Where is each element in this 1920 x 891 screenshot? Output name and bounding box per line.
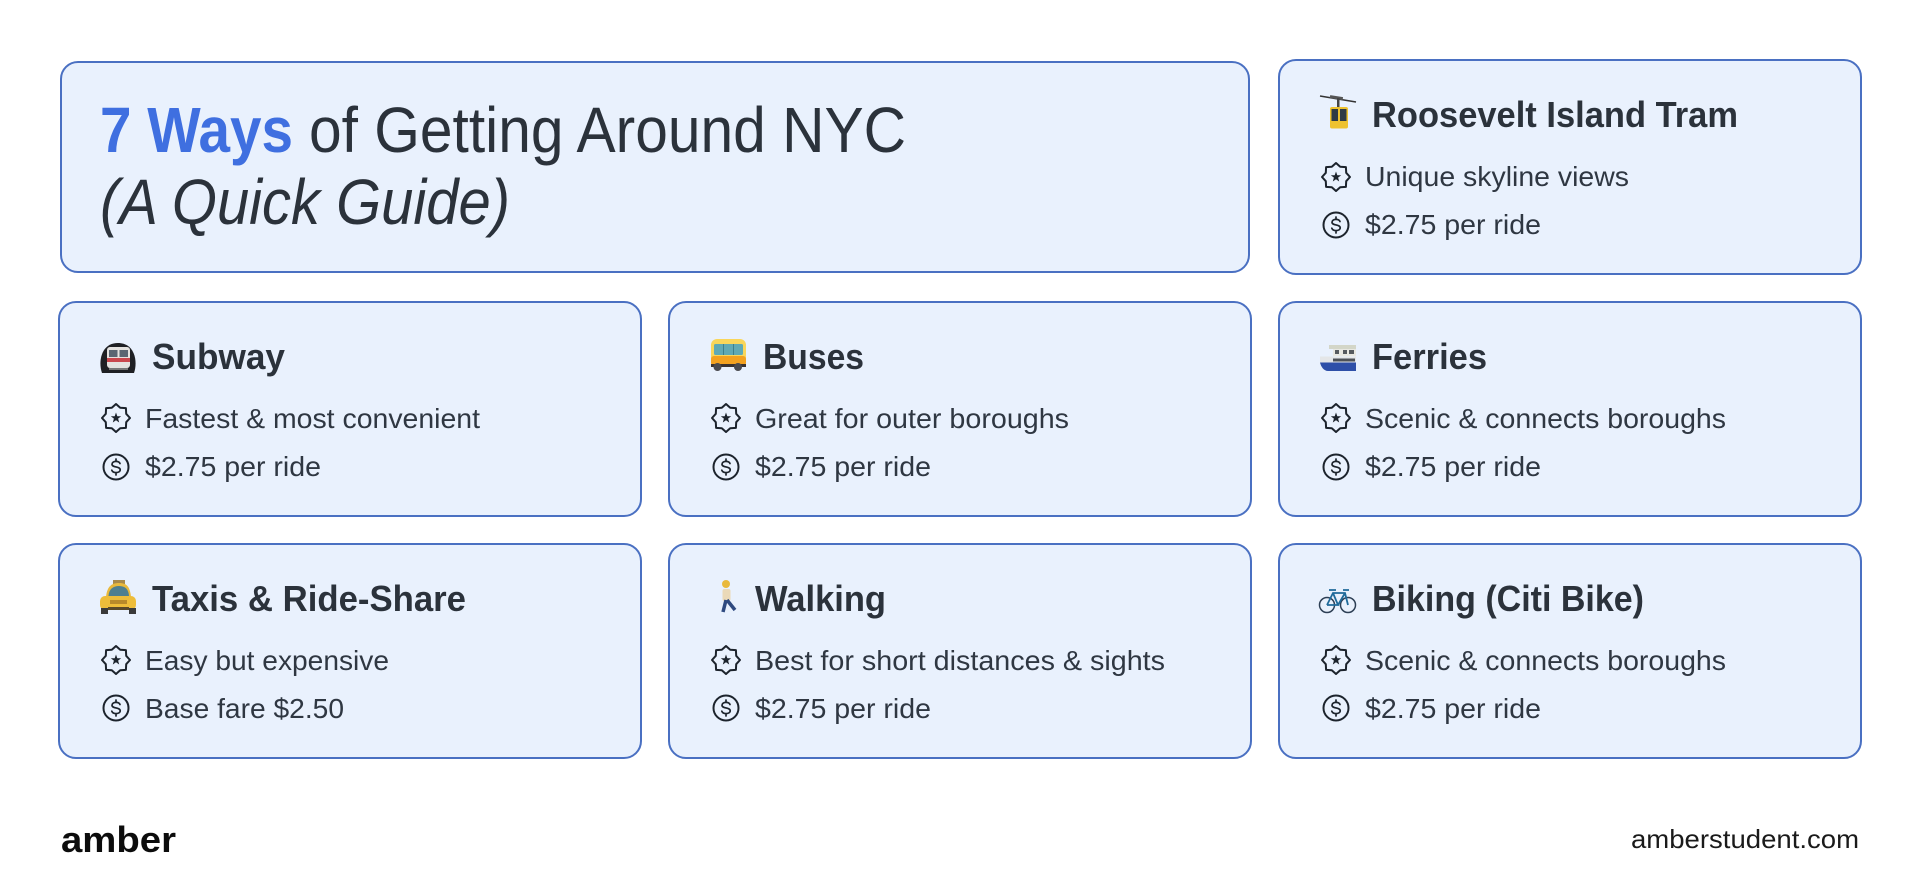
feature text: Best for short distances & sights	[755, 645, 1165, 676]
card background	[1279, 302, 1861, 516]
title line two: (A Quick Guide)	[100, 166, 510, 238]
feature text: Scenic & connects boroughs	[1365, 645, 1726, 676]
price text: $2.75 per ride	[145, 451, 321, 482]
card background	[669, 544, 1251, 758]
title line one remainder: of Getting Around NYC	[309, 94, 906, 166]
icon: price coin	[714, 696, 738, 720]
heading: Walking	[755, 578, 886, 619]
heading: Roosevelt Island Tram	[1372, 94, 1738, 135]
icon: feature badge	[1322, 404, 1350, 432]
icon: feature badge	[102, 404, 130, 432]
icon: minibus	[711, 339, 746, 371]
panel: Roosevelt Island Tram	[1279, 60, 1861, 274]
card background	[59, 302, 641, 516]
icon: price coin	[104, 454, 128, 480]
icon: feature badge	[1322, 646, 1350, 674]
price text: $2.75 per ride	[755, 451, 931, 482]
icon: price coin	[1324, 696, 1348, 720]
icon: walking person	[722, 580, 735, 612]
title highlight: 7 Ways: 7 Ways	[100, 94, 293, 166]
panel: Ferries	[1279, 302, 1861, 516]
icon: price coin	[1324, 454, 1348, 480]
icon: price coin	[1324, 212, 1348, 238]
price text: $2.75 per ride	[1365, 693, 1541, 724]
panel: Biking (Citi Bike)	[1279, 544, 1861, 758]
feature text: Unique skyline views	[1365, 161, 1629, 192]
price text: Base fare $2.50	[145, 693, 344, 724]
icon: bicycle	[1320, 590, 1356, 612]
card background	[1279, 60, 1861, 274]
heading: Taxis & Ride-Share	[152, 578, 466, 619]
icon: metro train	[100, 343, 136, 373]
title card background	[61, 62, 1249, 272]
logo: amber: amber	[61, 819, 176, 860]
icon: price coin	[104, 696, 128, 720]
panel: title	[61, 62, 1249, 272]
panel: Subway	[59, 302, 641, 516]
icon: taxi	[100, 580, 136, 614]
icon: price coin	[714, 454, 738, 480]
icon: aerial tramway	[1320, 95, 1356, 128]
feature text: Fastest & most convenient	[145, 403, 480, 434]
card background	[1279, 544, 1861, 758]
heading: Biking (Citi Bike)	[1372, 578, 1644, 619]
feature text: Scenic & connects boroughs	[1365, 403, 1726, 434]
feature text: Easy but expensive	[145, 645, 389, 676]
card background	[669, 302, 1251, 516]
icon: feature badge	[1322, 163, 1350, 191]
website url: amberstudent.com	[1631, 824, 1859, 854]
panel: Buses	[669, 302, 1251, 516]
heading: Subway	[152, 336, 285, 377]
heading: Buses	[763, 336, 864, 377]
card background	[59, 544, 641, 758]
heading: Ferries	[1372, 336, 1487, 377]
panel: Taxis & Ride-Share	[59, 544, 641, 758]
icon: feature badge	[712, 646, 740, 674]
feature text: Great for outer boroughs	[755, 403, 1069, 434]
panel: Walking	[669, 544, 1251, 758]
icon: ferry	[1320, 345, 1356, 371]
icon: feature badge	[712, 404, 740, 432]
price text: $2.75 per ride	[1365, 451, 1541, 482]
price text: $2.75 per ride	[1365, 209, 1541, 240]
price text: $2.75 per ride	[755, 693, 931, 724]
icon: feature badge	[102, 646, 130, 674]
